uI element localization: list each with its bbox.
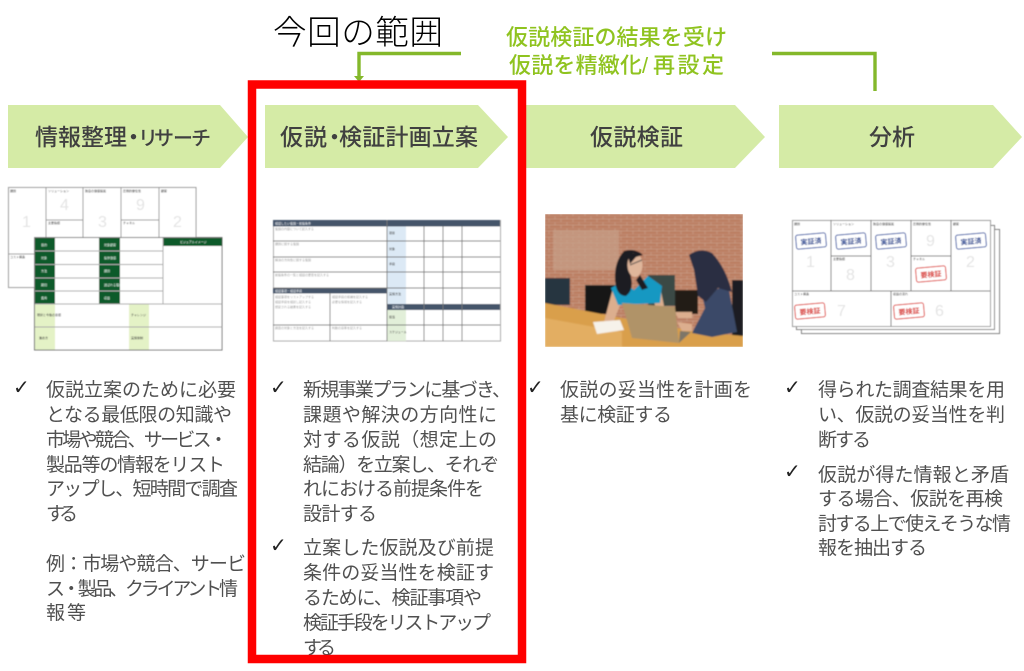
step 1: research: リサーチ xyxy=(138,128,211,150)
thumbnail: lean canvas and business sheet: 提供価値 xyxy=(104,255,116,260)
text block: analysis: い、仮説の妥当性を判 xyxy=(818,404,1005,426)
thumbnail: lean canvas and business sheet: 課題 xyxy=(10,188,16,193)
thumbnail: verified canvas with stamps: 8 xyxy=(846,267,855,284)
thumbnail: lean canvas and business sheet: ソリューション xyxy=(48,189,69,193)
thumbnail: lean canvas and business sheet: 方法 xyxy=(41,268,47,273)
thumbnail: lean canvas and business sheet: 9 xyxy=(136,197,145,214)
thumbnail: verification plan table: 検証手段を検討し記入する xyxy=(275,299,311,304)
thumbnail: verified canvas with stamps: 顧客 xyxy=(953,221,959,226)
text block: hypothesis planning: ✓ xyxy=(270,533,287,557)
thumbnail: verification plan table: 前提条件の一覧と検証の要否を記入する xyxy=(275,272,329,277)
thumbnail: lean canvas and business sheet: 進め方 xyxy=(39,335,48,340)
thumbnail: verified canvas with stamps: チャネル xyxy=(913,256,925,261)
step 2: hypothesis planning xyxy=(265,105,508,168)
thumbnail: lean canvas and business sheet: ビジュアルイメージ xyxy=(180,239,207,244)
text block: hypothesis planning: 課題や解決の方向性に xyxy=(303,404,497,426)
thumbnail: verification plan table: 調査の対象と方法を記入する xyxy=(275,325,314,330)
thumbnail: lean canvas and business sheet: 対象 xyxy=(41,255,47,260)
thumbnail: verified canvas with stamps: ソリューション xyxy=(833,222,854,226)
text block: analysis: 討する上で使えそうな情 xyxy=(818,513,1011,535)
thumbnail: lean canvas and business sheet: 期間 xyxy=(41,282,47,287)
thumbnail: lean canvas and business sheet: 選ばれる理由 xyxy=(104,282,122,287)
thumbnail: verification plan table: 担当 xyxy=(389,314,395,319)
text block: research: 製品等の情報をリスト xyxy=(46,454,225,476)
arrow: feedback into planning xyxy=(354,54,461,82)
thumbnail: verification plan table: 検証事項・検証手段 xyxy=(275,288,302,293)
text block: research xyxy=(13,375,246,624)
thumbnail: lean canvas and business sheet: 独自の価値提案 xyxy=(85,188,106,193)
text block: hypothesis planning: 条件の妥当性を検証す xyxy=(303,562,494,584)
feedback note: / xyxy=(642,53,649,78)
thumbnail: verified canvas with stamps: 圧倒的優位性 xyxy=(913,221,931,226)
text block: research: 報等 xyxy=(46,602,86,624)
thumbnail: verification plan table: 項目 xyxy=(389,230,395,235)
text block: analysis: 断する xyxy=(818,429,871,451)
thumbnail: verification plan table: 課題に関する仮説 xyxy=(275,241,299,246)
thumbnail: verification plan table: 検証手段の候補を記入する xyxy=(332,294,368,299)
step 3: verification: 仮説検証 xyxy=(590,124,683,150)
text block: hypothesis planning: 立案した仮説及び前提 xyxy=(303,537,494,559)
thumbnail: lean canvas and business sheet xyxy=(8,187,222,350)
thumbnail: verification plan table: 仮説の内容について記入する xyxy=(275,226,314,231)
text block: verification: ✓ xyxy=(527,375,544,399)
thumbnail: verification plan table: 判断の基準を記入する xyxy=(332,325,362,330)
text block: analysis xyxy=(784,375,1011,559)
woman left xyxy=(604,288,622,326)
thumbnail: verified canvas with stamps: 9 xyxy=(926,233,935,250)
thumbnail: lean canvas and business sheet: 課題 xyxy=(104,268,110,273)
thumbnail: verified canvas with stamps: 課題 xyxy=(794,221,800,226)
photo: two women in a meeting xyxy=(545,214,743,347)
thumbnail: verified canvas with stamps: 1 xyxy=(806,254,815,271)
line: feedback from analysis xyxy=(772,54,875,91)
thumbnail: verified canvas with stamps xyxy=(792,220,1000,334)
thumbnail: verification plan table: 手段 xyxy=(389,261,395,266)
thumbnail: verification plan table: 実施方法 xyxy=(389,291,401,296)
thumbnail: lean canvas and business sheet: コスト構造 xyxy=(10,254,25,259)
step 2: hypothesis planning: 仮説 xyxy=(280,124,327,150)
thumbnail: verified canvas with stamps: 収益の流れ xyxy=(893,291,908,296)
text block: analysis: ✓ xyxy=(784,375,801,399)
text block: hypothesis planning: 新規事業プランに基づき、 xyxy=(303,379,511,401)
thumbnail: verified canvas with stamps: 2 xyxy=(966,254,975,271)
text block: analysis: 報を抽出する xyxy=(818,537,927,559)
text block: research: 仮説立案のために必要 xyxy=(46,379,236,401)
thumbnail: verification plan table: スケジュール xyxy=(389,329,407,334)
text block: verification: 仮説の妥当性を計画を xyxy=(560,379,752,401)
text block: hypothesis planning: 対する仮説（想定上の xyxy=(303,429,497,451)
thumbnail: lean canvas and business sheet: チャレンジ xyxy=(131,312,146,317)
thumbnail: lean canvas and business sheet: 4 xyxy=(60,197,69,214)
step 3: verification xyxy=(526,105,765,168)
thumbnail: verified canvas with stamps: 要検証 xyxy=(920,269,942,280)
thumbnail: verified canvas with stamps: 7 xyxy=(837,303,846,320)
text block: hypothesis planning: 設計する xyxy=(303,503,377,525)
text block: hypothesis planning: れにおける前提条件を xyxy=(303,478,484,500)
thumbnail: verified canvas with stamps: 要検証 xyxy=(898,306,920,317)
text block: verification: 基に検証する xyxy=(560,404,672,426)
thumbnail: verification plan table: 必要な情報を記入する xyxy=(332,299,362,304)
text block: verification xyxy=(527,375,752,426)
paper xyxy=(593,320,624,334)
step 1: research xyxy=(8,105,248,168)
feedback note xyxy=(506,25,727,78)
thumbnail: lean canvas and business sheet: 顧客 xyxy=(161,188,167,193)
thumbnail: verification plan table: 解決の方向性に関する仮説 xyxy=(275,257,311,262)
woman right xyxy=(675,312,692,318)
scope highlight frame xyxy=(252,84,522,659)
step 2: hypothesis planning: ・ xyxy=(323,124,346,150)
step 1: research: ・ xyxy=(122,124,145,150)
text block: research: となる最低限の知識や xyxy=(46,404,232,426)
step 1: research: 情報整理 xyxy=(35,124,127,150)
thumbnail: lean canvas and business sheet: 2 xyxy=(173,214,182,231)
thumbnail: verification plan table: 対象 xyxy=(389,246,395,251)
text block: research: ス・製品、クライアント情 xyxy=(46,578,238,600)
thumbnail: lean canvas and business sheet: チャネル xyxy=(123,220,135,225)
feedback note: 再設定 xyxy=(653,53,724,78)
thumbnail: lean canvas and business sheet: 費用 xyxy=(41,295,47,300)
thumbnail: verified canvas with stamps: 実証済 xyxy=(880,236,902,247)
thumbnail: lean canvas and business sheet: 対象顧客 xyxy=(104,242,116,247)
thumbnail: lean canvas and business sheet: 圧倒的優位性 xyxy=(123,188,141,193)
thumbnail: verification plan table: 実施計画 xyxy=(392,304,404,309)
thumbnail: verification plan table: 検証事項をリストアップする xyxy=(275,294,314,299)
text block: hypothesis planning: るために、検証事項や xyxy=(303,587,482,609)
thumbnail: verification plan table: 想定される結果を記入する xyxy=(275,304,311,309)
thumbnail: verified canvas with stamps: 3 xyxy=(886,254,895,271)
thumbnail: lean canvas and business sheet: 3 xyxy=(98,214,107,231)
step 4: analysis xyxy=(779,105,1022,168)
thumbnail: verified canvas with stamps: 独自の価値提案 xyxy=(873,221,894,226)
thumbnail: verified canvas with stamps: 要検証 xyxy=(799,306,821,317)
text block: research: 例：市場や競合、サービ xyxy=(46,553,246,575)
thumbnail: lean canvas and business sheet: 収益 xyxy=(104,295,110,300)
laptop xyxy=(622,303,679,343)
text block: research: 市場や競合、サービス・ xyxy=(46,429,228,451)
feedback note: 仮説検証の結果を受け xyxy=(506,25,727,50)
text block: analysis: 仮説が得た情報と矛盾 xyxy=(818,464,1009,486)
text block: research: する xyxy=(46,504,78,525)
text block: hypothesis planning: する xyxy=(303,638,336,659)
step 4: analysis: 分析 xyxy=(869,124,915,150)
thumbnail: verified canvas with stamps: 主要指標 xyxy=(833,256,845,261)
thumbnail: verified canvas with stamps: 6 xyxy=(935,303,944,320)
text block: hypothesis planning xyxy=(270,375,511,659)
step 2: hypothesis planning: 検証計画立案 xyxy=(339,124,478,150)
text block: analysis: ✓ xyxy=(784,459,801,483)
text block: analysis: 得られた調査結果を用 xyxy=(818,379,1005,401)
thumbnail: verification plan table: 検証したい仮説・前提条件 xyxy=(275,220,311,226)
text block: hypothesis planning: 結論）を立案し、それぞ xyxy=(303,454,499,476)
text block: research: ✓ xyxy=(13,375,30,399)
thumbnail: lean canvas and business sheet: 現状と今後の目標 xyxy=(37,312,61,317)
title: scope label: 今回の範囲 xyxy=(273,15,443,52)
text block: research: アップし、短時間で調査 xyxy=(46,478,238,500)
text block: analysis: する場合、仮説を再検 xyxy=(818,488,1003,510)
thumbnail: verification plan table xyxy=(273,220,500,341)
thumbnail: lean canvas and business sheet: 実施体制 xyxy=(131,335,143,340)
thumbnail: lean canvas and business sheet: 主要指標 xyxy=(48,220,60,225)
thumbnail: verified canvas with stamps: 実証済 xyxy=(800,236,822,247)
text block: hypothesis planning: ✓ xyxy=(270,375,287,399)
thumbnail: verified canvas with stamps: 実証済 xyxy=(840,236,862,247)
thumbnail: lean canvas and business sheet: 1 xyxy=(22,214,31,231)
thumbnail: verified canvas with stamps: コスト構造 xyxy=(794,291,809,296)
thumbnail: lean canvas and business sheet: 目的 xyxy=(41,242,47,247)
thumbnail: verified canvas with stamps: 実証済 xyxy=(960,236,982,247)
text block: hypothesis planning: 検証手段をリストアップ xyxy=(303,612,491,634)
feedback note: 仮説を精緻化 xyxy=(509,53,642,78)
